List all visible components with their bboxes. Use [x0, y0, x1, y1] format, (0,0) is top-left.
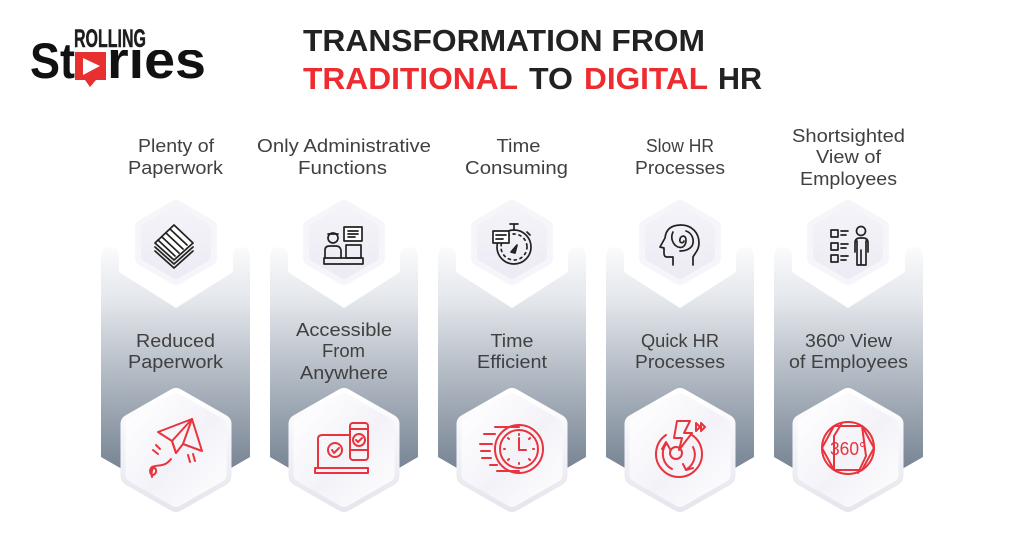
digital label: Processes: [635, 352, 725, 372]
traditional label: [792, 126, 905, 189]
digital label: Anywhere: [300, 363, 388, 383]
gradient panel: [438, 247, 586, 500]
gradient panel: [774, 247, 923, 500]
logo: Rolling Stories: ries: [107, 31, 206, 90]
logo: Rolling Stories: [31, 29, 204, 87]
traditional label: [635, 136, 725, 178]
traditional label: View of: [816, 147, 882, 167]
digital label: of Employees: [789, 352, 908, 372]
icon: fast clock: [480, 425, 543, 473]
traditional label: Slow HR: [646, 136, 714, 156]
gradient panel: [606, 247, 754, 500]
column 1: paperwork: [101, 136, 250, 502]
digital label: Time: [490, 331, 534, 351]
logo: Rolling Stories: ROLLING: [74, 25, 146, 53]
traditional label: Time: [496, 136, 540, 156]
digital label: [128, 331, 224, 372]
bottom hexagon: [802, 398, 894, 502]
digital label: Quick HR: [641, 331, 719, 351]
top hexagon: [143, 208, 209, 277]
digital label: Paperwork: [128, 352, 224, 372]
icon: head with spiral: [660, 225, 699, 265]
gradient panel: [270, 247, 418, 500]
traditional label: Plenty of: [138, 136, 215, 156]
icon: lightning and arrows: [656, 421, 705, 477]
title: TRADITIONAL: [303, 61, 518, 96]
top hexagon: [479, 208, 545, 277]
digital label: Accessible: [296, 320, 392, 340]
traditional label: Employees: [800, 169, 897, 189]
bottom hexagon: [634, 398, 726, 502]
icon: checklist and person: [831, 226, 868, 265]
traditional label: Functions: [298, 158, 387, 178]
icon: stopwatch: [493, 224, 531, 264]
title: TRANSFORMATION FROM: [303, 23, 705, 58]
title: DIGITAL: [584, 61, 708, 96]
digital label: Efficient: [477, 352, 547, 372]
digital label: [635, 331, 725, 372]
column 5: employees view: [774, 126, 923, 502]
top hexagon: [815, 208, 881, 277]
column 2: administrative: [257, 136, 431, 502]
title: [303, 23, 762, 96]
bottom hexagon: [466, 398, 558, 502]
traditional label: Consuming: [465, 158, 568, 178]
title: TO: [529, 61, 573, 96]
traditional label: [257, 136, 431, 178]
traditional label: [465, 136, 568, 178]
bottom hexagon: [130, 398, 222, 502]
top hexagon: [311, 208, 377, 277]
icon: 360 sphere: [822, 422, 874, 474]
traditional label: Paperwork: [128, 158, 224, 178]
column 3: time: [438, 136, 586, 502]
title: HR: [718, 61, 762, 96]
traditional label: Shortsighted: [792, 126, 905, 146]
digital label: [477, 331, 547, 372]
traditional label: Processes: [635, 158, 725, 178]
icon: laptop and phone: [315, 423, 368, 473]
icon: 360 sphere: 360°: [830, 439, 866, 459]
digital label: [789, 331, 908, 372]
traditional label: Only Administrative: [257, 136, 431, 156]
digital label: [296, 320, 392, 383]
bottom hexagon: [298, 398, 390, 502]
digital label: 360º View: [805, 331, 893, 351]
column 4: HR processes: [606, 136, 754, 502]
gradient panel: [101, 247, 250, 500]
logo: Rolling Stories: St: [30, 33, 75, 89]
digital label: From: [322, 341, 365, 361]
top hexagon: [647, 208, 713, 277]
icon: paper stack: [155, 225, 193, 268]
traditional label: [128, 136, 224, 178]
icon: administrator at desk: [324, 227, 363, 264]
icon: paper plane: [150, 419, 202, 477]
digital label: Reduced: [136, 331, 215, 351]
